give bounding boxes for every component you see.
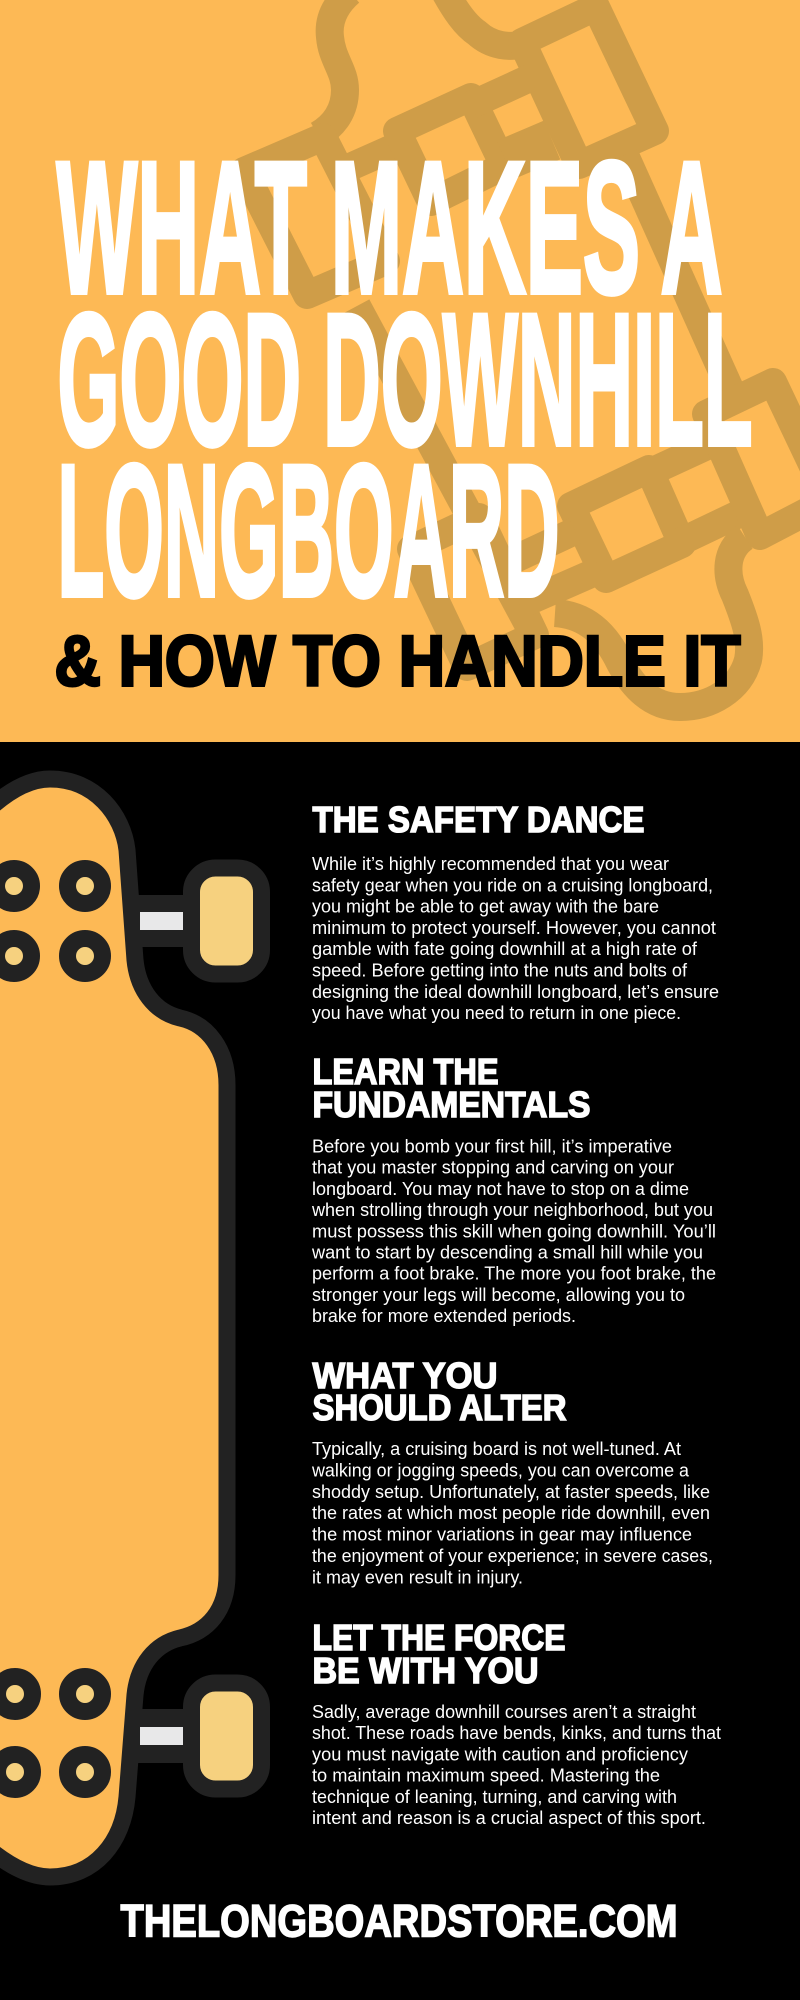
text block: fundamentals: perform a foot brake. The more you foot brake, the <box>312 1263 716 1284</box>
text block: safety: you might be able to get away with the bare <box>312 896 659 917</box>
text block: alter: the enjoyment of your experience; in severe cases, <box>312 1545 713 1566</box>
text block: force: shot. These roads have bends, kinks, and turns that <box>312 1722 721 1743</box>
panel: let the force be with you <box>312 1617 721 1828</box>
icon: ghost longboard <box>244 0 800 707</box>
text block: force <box>312 1701 721 1828</box>
text block: safety <box>312 853 719 1023</box>
heading: let the force be with you: BE WITH YOU <box>312 1650 538 1691</box>
text block: safety: you have what you need to return in one piece. <box>312 1002 681 1023</box>
heading: learn the fundamentals: FUNDAMENTALS <box>312 1084 590 1125</box>
text block: force: intent and reason is a crucial aspect of this sport. <box>312 1807 706 1828</box>
heading: let the force be with you <box>312 1617 566 1691</box>
panel: what you should alter <box>311 1355 713 1587</box>
text block: alter: Typically, a cruising board is not well-tuned. At <box>312 1438 681 1459</box>
text block: fundamentals: want to start by descending a small hill while you <box>311 1242 703 1262</box>
text block: alter: walking or jogging speeds, you can overcome a <box>311 1459 690 1480</box>
text block: fundamentals: brake for more extended periods. <box>312 1305 576 1326</box>
heading: the safety dance: THE SAFETY DANCE <box>312 799 644 840</box>
text block: force: you must navigate with caution and proficiency <box>312 1743 689 1764</box>
top truck <box>130 868 262 974</box>
text block: force: to maintain maximum speed. Mastering the <box>312 1765 660 1786</box>
text block: safety: minimum to protect yourself. However, you cannot <box>312 917 716 938</box>
heading: what you should alter: WHAT YOU <box>312 1355 498 1396</box>
heading: let the force be with you: LET THE FORCE <box>312 1617 566 1658</box>
text block: force: technique of leaning, turning, and carving with <box>312 1786 677 1807</box>
text block: safety: gamble with fate going downhill at a high rate of <box>312 938 698 959</box>
panel: learn the fundamentals <box>311 1051 716 1326</box>
heading: learn the fundamentals <box>312 1051 590 1125</box>
panel: the safety dance <box>312 799 719 1023</box>
text block: fundamentals <box>311 1136 716 1326</box>
text block: force: Sadly, average downhill courses aren’t a straight <box>312 1701 696 1722</box>
text block: fundamentals: must possess this skill when going downhill. You’ll <box>312 1220 716 1241</box>
text block: fundamentals: when strolling through your neighborhood, but you <box>311 1199 713 1220</box>
text block: safety: While it’s highly recommended that you wear <box>312 853 669 874</box>
text block: alter: it may even result in injury. <box>312 1566 523 1587</box>
top bolts <box>0 868 102 974</box>
heading: learn the fundamentals: LEARN THE <box>312 1051 498 1092</box>
text block: fundamentals: Before you bomb your first hill, it’s imperative <box>312 1136 672 1156</box>
icon: longboard illustration <box>0 779 262 1877</box>
text block: fundamentals: stronger your legs will become, allowing you to <box>312 1284 685 1305</box>
text block: fundamentals: longboard. You may not have to stop on a dime <box>312 1178 689 1199</box>
text block: alter: the rates at which most people ride downhill, even <box>312 1502 710 1523</box>
panel: header <box>0 0 800 742</box>
text block: fundamentals: that you master stopping and carving on your <box>312 1157 674 1178</box>
board deck <box>0 779 227 1877</box>
footer url: THELONGBOARDSTORE.COM <box>120 1896 678 1946</box>
text block: safety: safety gear when you ride on a cruising longboard, <box>312 874 713 895</box>
text block: alter <box>311 1438 713 1587</box>
subtitle: & HOW TO HANDLE IT <box>54 622 740 702</box>
heading: what you should alter <box>312 1355 566 1428</box>
text block: safety: designing the ideal downhill longboard, let’s ensure <box>312 981 719 1002</box>
bottom truck <box>130 1683 262 1789</box>
heading: what you should alter: SHOULD ALTER <box>312 1387 566 1428</box>
text block: alter: shoddy setup. Unfortunately, at faster speeds, like <box>312 1481 710 1502</box>
text block: safety: speed. Before getting into the nuts and bolts of <box>312 960 688 980</box>
text block: alter: the most minor variations in gear may influence <box>312 1524 692 1545</box>
bottom bolts <box>0 1676 102 1790</box>
title <box>56 122 752 636</box>
